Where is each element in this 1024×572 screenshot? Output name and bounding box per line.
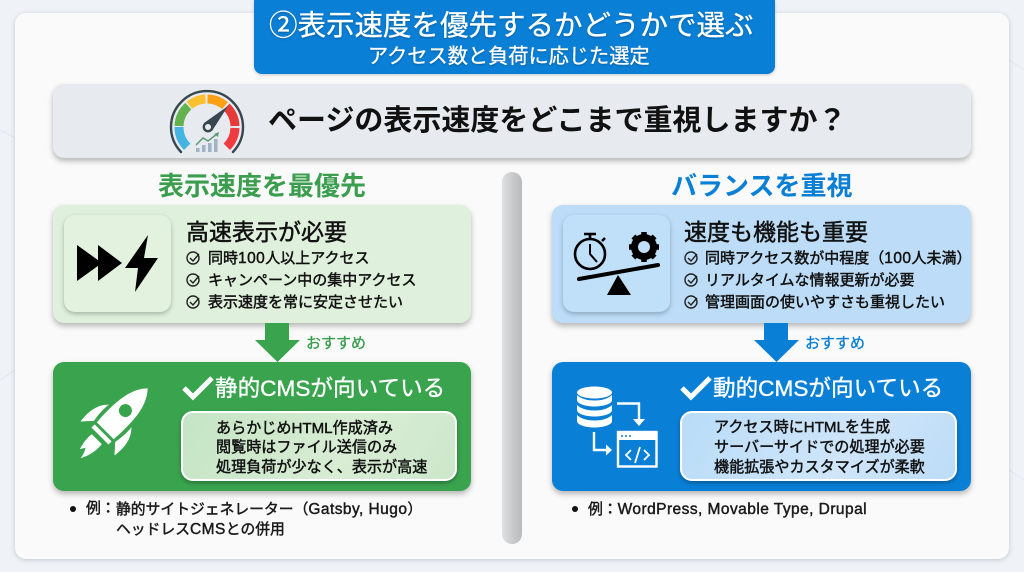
- icon: database to browser: [577, 386, 658, 468]
- recommend label right: おすすめ: [805, 335, 865, 352]
- question text: ページの表示速度をどこまで重視しますか？: [268, 105, 847, 137]
- icon: speedometer gauge: [170, 90, 244, 154]
- checklist: 管理画面の使いやすさも重視したい: [705, 294, 945, 311]
- arrow: right down: [754, 323, 799, 362]
- detail box: [680, 411, 957, 481]
- checklist: [186, 250, 417, 311]
- title: ②表示速度を優先するかどうかで選ぶ: [269, 10, 754, 42]
- icon box: fast forward and bolt: [64, 215, 171, 312]
- checklist: キャンペーン中の集中アクセス: [208, 272, 417, 289]
- example left: 静的サイトジェネレーター（Gatsby, Hugo）: [116, 501, 422, 518]
- icon: check: [182, 376, 214, 400]
- panel: static CMS result: [53, 362, 471, 491]
- checklist: [684, 250, 972, 311]
- requirement heading: 高速表示が必要: [186, 219, 347, 245]
- divider: [502, 172, 522, 544]
- detail box: [181, 411, 457, 481]
- detail box: 処理負荷が少なく、表示が高速: [216, 459, 427, 476]
- example left: [70, 500, 422, 538]
- detail box: アクセス時にHTMLを生成: [714, 419, 890, 436]
- checklist: 表示速度を常に安定させたい: [208, 294, 403, 311]
- icon box: stopwatch gear balance: [563, 215, 670, 312]
- example left: 例：: [86, 501, 116, 517]
- checklist: 同時アクセス数が中程度（100人未満）: [705, 250, 972, 267]
- result heading: 動的CMSが向いている: [713, 376, 943, 401]
- icon: check: [680, 376, 712, 400]
- question bar: [53, 84, 971, 158]
- detail box: 機能拡張やカスタマイズが柔軟: [714, 459, 925, 476]
- panel: right column heading: バランスを重視: [671, 171, 852, 201]
- checklist: 同時100人以上アクセス: [208, 250, 370, 267]
- detail box: あらかじめHTML作成済み: [216, 420, 393, 437]
- panel: left requirements: [53, 205, 471, 323]
- result heading: 静的CMSが向いている: [215, 376, 445, 401]
- panel: dynamic CMS result: [552, 362, 971, 491]
- arrow: left down: [255, 323, 300, 362]
- panel: right requirements: [552, 205, 971, 323]
- requirement heading: 速度も機能も重要: [684, 219, 868, 245]
- subtitle: アクセス数と負荷に応じた選定: [368, 46, 650, 68]
- example left: ヘッドレスCMSとの併用: [116, 521, 285, 538]
- recommend label left: おすすめ: [306, 335, 366, 352]
- icon: rocket: [80, 388, 148, 458]
- panel: left column heading: 表示速度を最優先: [158, 171, 366, 201]
- header banner: [254, 0, 775, 74]
- example right: 例：WordPress, Movable Type, Drupal: [588, 501, 867, 518]
- detail box: サーバーサイドでの処理が必要: [714, 439, 925, 456]
- detail box: 閲覧時はファイル送信のみ: [216, 439, 397, 456]
- checklist: リアルタイムな情報更新が必要: [705, 272, 915, 289]
